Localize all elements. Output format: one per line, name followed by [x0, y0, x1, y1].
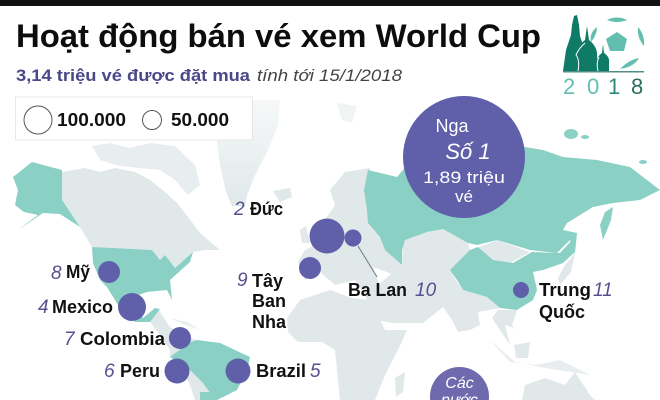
subtitle: 3,14 triệu vé được đặt mua: [16, 66, 251, 85]
logo: cathedral: [563, 15, 609, 71]
bubble: Colombia: 7: [64, 329, 76, 350]
bubble: Germany: [233, 199, 344, 254]
bubble: China: Quốc: [539, 302, 585, 322]
bubble: other countries: Các: [445, 375, 474, 392]
bubble: USA: [51, 261, 120, 284]
bubble: Spain: Tây: [252, 271, 283, 291]
legend: 50.000 circle: [142, 110, 162, 130]
map: teal countries: [13, 129, 660, 400]
bubble: Russia: vé: [455, 187, 473, 206]
bubble: Mexico: 4: [38, 297, 49, 318]
bubble: Poland: Ba Lan: [348, 280, 407, 300]
logo: World Cup 2018: [563, 15, 644, 99]
title: Hoạt động bán vé xem World Cup: [16, 18, 541, 54]
logo: year: 0: [587, 74, 599, 99]
bubble: USA: Mỹ: [66, 262, 90, 282]
bubble: Peru: Peru: [120, 361, 160, 381]
logo: year: 1: [608, 74, 620, 99]
bubble: Spain: Ban: [252, 291, 286, 311]
top bar: [0, 0, 660, 6]
bubble: Mexico: [38, 293, 146, 321]
bubble: Spain: [237, 257, 321, 332]
bubble: Brazil: [226, 358, 321, 384]
legend: 100.000 circle: [24, 106, 52, 134]
legend: [16, 97, 252, 140]
bubble: Russia: Nga: [435, 116, 469, 136]
bubble: USA: 8: [51, 263, 62, 284]
logo: year: 2: [563, 74, 575, 99]
bubble: Poland: 10: [415, 280, 437, 301]
bubble: China: 11: [593, 280, 613, 301]
bubble: Russia: Số 1: [445, 139, 491, 164]
bubble: Spain: Nha: [252, 312, 287, 332]
bubble: Spain: 9: [237, 270, 248, 291]
map: grey countries: [62, 100, 595, 400]
bubble: China: [513, 280, 613, 322]
bubble: other countries: [430, 367, 489, 400]
bubble: Peru: 6: [104, 361, 115, 382]
bubble: Russia: 1,89 triệu: [423, 168, 505, 187]
bubble: Brazil: Brazil: [256, 361, 306, 381]
subtitle: [16, 66, 403, 85]
legend: 100.000: [57, 110, 126, 130]
bubble: China: Trung: [539, 280, 591, 300]
legend: 50.000: [171, 110, 229, 130]
bubble: Brazil: 5: [310, 361, 321, 382]
bubble: Poland: [344, 230, 437, 301]
logo: year: 8: [631, 74, 643, 99]
logo: base line: [563, 71, 644, 72]
bubble: Peru: [104, 358, 190, 384]
subtitle: tính tới 15/1/2018: [257, 66, 403, 85]
bubble: Mexico: Mexico: [52, 297, 113, 317]
bubble: Germany: Đức: [250, 199, 283, 219]
logo: football: [591, 18, 644, 69]
bubble: Colombia: [64, 327, 191, 350]
bubble: Russia: [403, 96, 525, 218]
world map: [13, 100, 660, 400]
bubble: Germany: 2: [233, 199, 245, 220]
bubble: Colombia: Colombia: [80, 329, 166, 349]
